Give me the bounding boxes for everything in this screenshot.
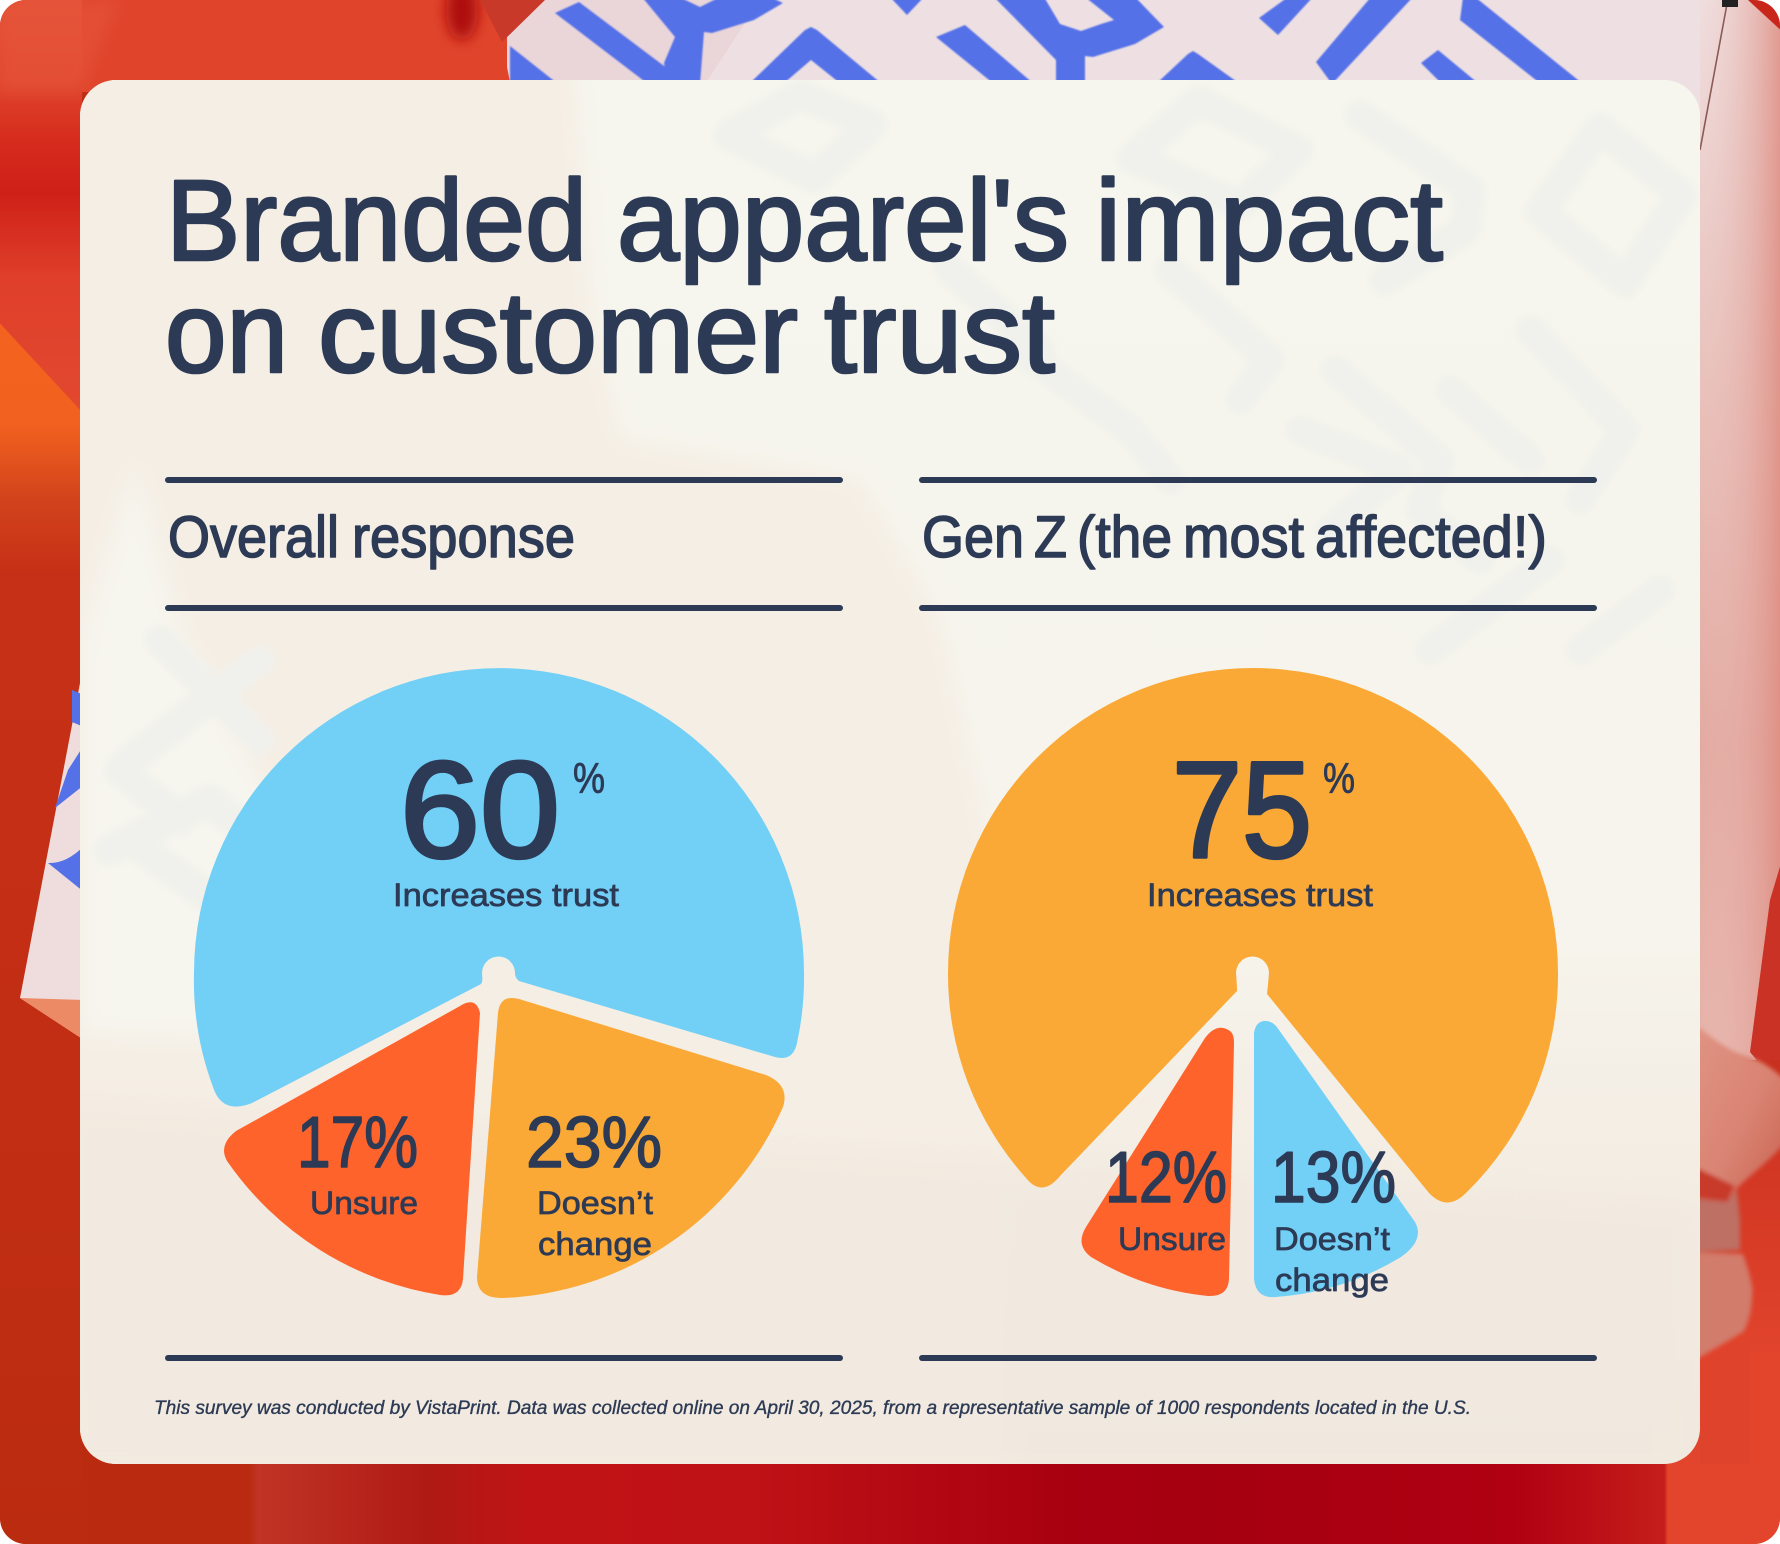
title: [165, 157, 1443, 397]
label: 75% increases trust: Increases trust: [1147, 877, 1373, 913]
label: 60% increases trust: 60: [400, 734, 560, 887]
heading rules and title: overall response: Overall: [168, 505, 339, 570]
faint logo pattern behind card: [235, 668, 244, 684]
left garment column: [0, 300, 82, 1544]
footnote: This survey was conducted by VistaPrint. Data was collected online on April 30, 2025, from a representative sample of 1000 respondents located in the U.S.: [154, 1398, 1471, 1419]
label: 13% doesn't change: 13%: [1271, 1138, 1396, 1218]
label: 13% doesn't change: Doesn’t: [1274, 1221, 1390, 1257]
slice: doesn't change 23%: [477, 998, 785, 1298]
label: 17% unsure: 17%: [297, 1103, 418, 1183]
lower right garment: [1736, 1060, 1780, 1544]
heading rules and title: overall response: [165, 477, 843, 611]
label: 23% doesn't change: Doesn’t: [537, 1185, 653, 1221]
label: 13% doesn't change: [1271, 1138, 1396, 1298]
left box sliver: [20, 683, 80, 1038]
slice: doesn't change 13%: [1254, 1021, 1418, 1297]
panel: Gen Z: [919, 477, 1597, 1361]
heading rules and title: Gen Z: [919, 477, 1597, 611]
slice: unsure 12%: [1082, 1028, 1234, 1296]
label: 60% increases trust: [393, 734, 619, 913]
label: 12% unsure: 12%: [1105, 1138, 1227, 1218]
title: trust: [824, 269, 1055, 397]
panel: overall response: [165, 477, 843, 1361]
slice: increases trust 75%: [948, 668, 1558, 1202]
box top with logo pattern: [507, 0, 1700, 116]
title: on: [165, 269, 288, 397]
title: impact: [1095, 157, 1443, 285]
label: 75% increases trust: %: [1323, 755, 1355, 803]
label: 60% increases trust: Increases trust: [393, 877, 619, 913]
pie chart: Gen Z: [948, 668, 1558, 1298]
label: 75% increases trust: 75: [1172, 734, 1312, 887]
label: 17% unsure: Unsure: [310, 1185, 418, 1221]
heading rules and title: overall response: response: [352, 505, 575, 570]
label: 75% increases trust: [1147, 734, 1373, 913]
title: customer: [318, 269, 798, 397]
right side of box: [1700, 0, 1780, 1095]
slice: unsure 17%: [224, 1002, 480, 1295]
heading rules and title: Gen Z: Z: [1034, 505, 1067, 570]
label: 23% doesn't change: [526, 1103, 662, 1262]
heading rules and title: Gen Z: affected!): [1315, 505, 1547, 570]
pie chart: overall response: [194, 668, 804, 1298]
heading rules and title: Gen Z: most: [1183, 505, 1304, 570]
heading rules and title: Gen Z: Gen: [922, 505, 1024, 570]
label: 23% doesn't change: change: [538, 1226, 652, 1262]
slice: increases trust 60%: [194, 668, 804, 1107]
label: 12% unsure: Unsure: [1118, 1221, 1226, 1257]
label: 13% doesn't change: change: [1275, 1262, 1389, 1298]
title: Branded: [166, 157, 587, 285]
label: 12% unsure: [1105, 1138, 1227, 1257]
heading rules and title: Gen Z: (the: [1077, 505, 1172, 570]
label: 23% doesn't change: 23%: [526, 1103, 662, 1183]
label: 17% unsure: [297, 1103, 418, 1221]
label: 60% increases trust: %: [573, 755, 605, 803]
title: apparel's: [617, 157, 1069, 285]
hand holding the box: [1695, 1028, 1780, 1360]
top-left garment fabric: [0, 0, 550, 412]
